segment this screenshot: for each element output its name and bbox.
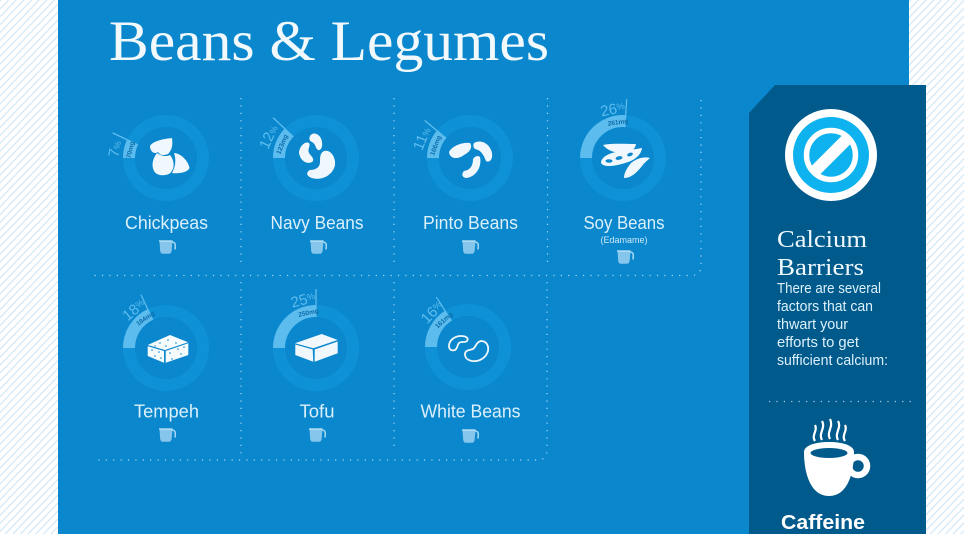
card: pinto beans bbox=[410, 120, 518, 254]
label: white beans: White Beans bbox=[420, 402, 520, 422]
label: soy beans: Soy Beans bbox=[584, 213, 664, 233]
chart: soy beans 26% bbox=[586, 99, 660, 195]
title: Beans & Legumes bbox=[109, 10, 549, 73]
card: tempeh bbox=[119, 295, 203, 442]
icon: tofu block bbox=[295, 334, 338, 362]
icon: white beans bbox=[449, 336, 488, 361]
text: intro: efforts to get bbox=[777, 335, 859, 351]
icon: measuring cup bbox=[159, 241, 175, 254]
chart: navy beans 12%: 12% bbox=[256, 122, 282, 152]
chart: tofu 25%: 250mg bbox=[298, 308, 319, 319]
label: navy beans: Navy Beans bbox=[270, 213, 364, 233]
icon: measuring cup bbox=[309, 429, 325, 442]
heading: calcium barriers: Calcium bbox=[777, 227, 867, 253]
icon: coffee cup bbox=[804, 419, 867, 496]
card: white beans bbox=[418, 297, 520, 443]
chart: navy beans 12%: 123mg bbox=[276, 134, 290, 155]
label: pinto beans: Pinto Beans bbox=[423, 213, 518, 233]
icon: measuring cup bbox=[159, 429, 175, 442]
chart: soy beans 26%: 26 bbox=[599, 100, 619, 120]
icon: measuring cup bbox=[310, 241, 326, 254]
icon: chickpeas bbox=[150, 138, 190, 175]
chart: soy beans 26%: 261mg bbox=[607, 118, 629, 128]
label: edamame: (Edamame) bbox=[600, 235, 648, 246]
chart: chickpeas 7% bbox=[105, 121, 203, 195]
chart: soy beans 26%: % bbox=[616, 101, 626, 112]
chart: tempeh 18%: % bbox=[133, 297, 146, 310]
heading: caffeine: Caffeine bbox=[781, 512, 865, 534]
chart: tofu 25%: 25 bbox=[289, 291, 310, 312]
chart: tempeh 18% bbox=[119, 295, 203, 385]
chart: navy beans 12% bbox=[256, 118, 353, 195]
text: intro: There are several bbox=[777, 281, 881, 297]
text: intro: sufficient calcium: bbox=[777, 353, 888, 369]
heading: calcium barriers: Barriers bbox=[777, 255, 864, 281]
chart: tofu 25% bbox=[279, 289, 353, 385]
icon: pinto beans bbox=[449, 141, 492, 178]
chart: white beans 16%: 16 bbox=[418, 304, 442, 327]
chart: pinto beans 11%: 11% bbox=[410, 125, 435, 153]
chart: pinto beans 11% bbox=[410, 120, 507, 195]
icon: no symbol bbox=[785, 109, 877, 201]
icon: soy bean pods bbox=[601, 144, 650, 178]
chart: white beans 16%: 161mg bbox=[434, 311, 454, 330]
card: chickpeas bbox=[105, 121, 208, 254]
chart: tempeh 18%: 184mg bbox=[135, 310, 156, 328]
card: navy beans bbox=[256, 118, 364, 254]
chart: chickpeas 7%: 70mg bbox=[126, 141, 136, 159]
icon: measuring cup bbox=[462, 430, 478, 443]
icon: navy beans bbox=[299, 134, 335, 179]
panel: calcium barriers bbox=[749, 85, 926, 534]
icon: tempeh block bbox=[148, 335, 188, 363]
text: intro: thwart your bbox=[777, 317, 848, 333]
icon: measuring cup bbox=[617, 251, 633, 264]
chart: white beans 16%: % bbox=[431, 299, 443, 312]
label: tofu: Tofu bbox=[300, 402, 334, 422]
chart: white beans 16% bbox=[418, 297, 505, 384]
chart: tempeh 18%: 18 bbox=[119, 301, 143, 325]
chart: pinto beans 11%: 106mg bbox=[429, 135, 443, 157]
text: intro: factors that can bbox=[777, 299, 873, 315]
card: tofu bbox=[279, 289, 353, 442]
label: chickpeas: Chickpeas bbox=[125, 213, 208, 233]
label: tempeh: Tempeh bbox=[134, 402, 199, 422]
chart: chickpeas 7%: 7% bbox=[105, 140, 125, 159]
chart: tofu 25%: % bbox=[306, 291, 316, 302]
icon: measuring cup bbox=[462, 241, 478, 254]
card: soy beans bbox=[584, 99, 664, 264]
